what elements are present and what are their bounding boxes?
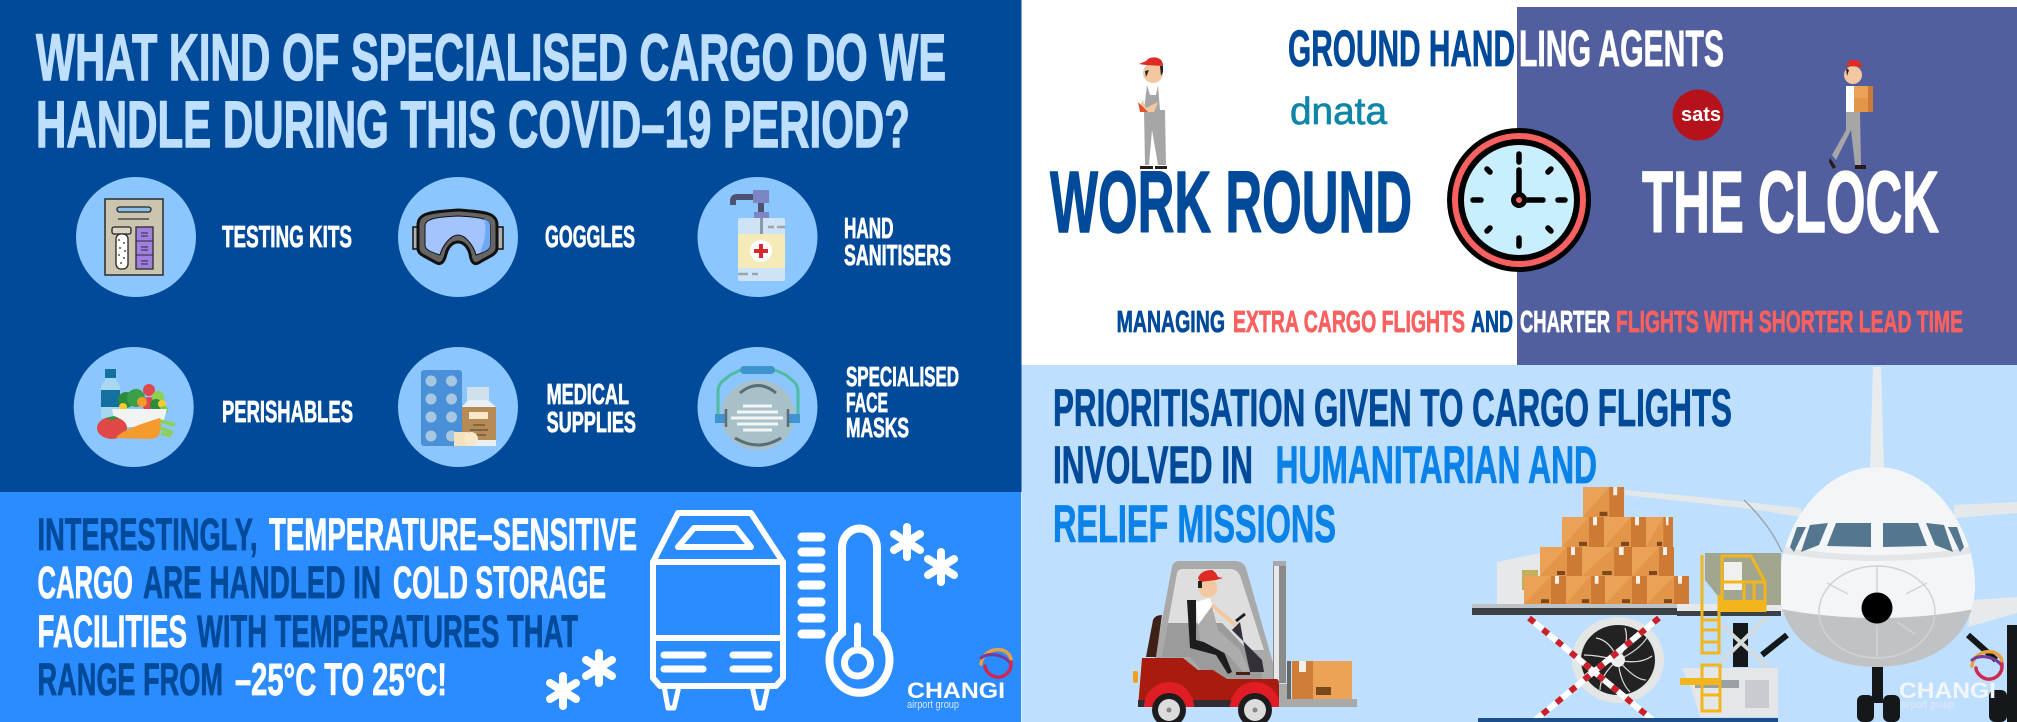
icon: snowflakes	[550, 527, 954, 706]
text block: cold storage facts: TEMPERATURE–SENSITIVE	[269, 509, 637, 560]
item: testing kits	[76, 177, 352, 297]
text block: cold storage facts: COLD STORAGE	[393, 557, 606, 608]
text: managing cargo flights	[1117, 304, 1963, 339]
text block: cold storage facts: FACILITIES	[38, 606, 187, 657]
icon: cold storage truck	[653, 513, 783, 708]
text: prioritisation heading	[1053, 379, 1732, 554]
item: hand sanitisers: HAND	[844, 213, 894, 245]
heading: ground handling agents: LING AGENTS	[1519, 20, 1724, 77]
title: HANDLE DURING THIS COVID–19 PERIOD?	[36, 87, 910, 161]
illustration: worker carrying boxes	[1829, 60, 1873, 169]
panel: specialised cargo	[0, 0, 1021, 492]
driver	[1187, 570, 1264, 675]
illustration: worker with clipboard	[1138, 57, 1167, 169]
text block: cold storage facts: CARGO	[38, 557, 133, 608]
item: perishables: PERISHABLES	[222, 394, 353, 429]
logo: changi airport group: airport group	[1900, 699, 1954, 711]
text: managing cargo flights: AND	[1471, 304, 1513, 339]
title	[36, 20, 946, 161]
text block: cold storage facts	[38, 509, 637, 705]
logo: changi airport group: CHANGI	[1899, 678, 1996, 703]
text block: cold storage facts: ARE HANDLED IN	[143, 557, 381, 608]
item: medical supplies	[398, 347, 636, 467]
illustration: jet engine	[1572, 617, 1664, 703]
text: prioritisation heading: INVOLVED IN	[1053, 436, 1253, 495]
text block: cold storage facts: –25°C TO 25°C!	[235, 654, 447, 705]
text: managing cargo flights: EXTRA CARGO FLIGHTS	[1233, 304, 1465, 339]
title: WHAT KIND OF SPECIALISED CARGO DO WE	[36, 20, 946, 94]
text block: cold storage facts: RANGE FROM	[38, 654, 223, 705]
illustration: boxes on cargo loader	[1472, 487, 1781, 722]
item: specialised face masks: MASKS	[846, 412, 909, 443]
item: medical supplies: MEDICAL	[547, 379, 629, 411]
panel: ground handling agents	[1020, 0, 2017, 492]
forklift body	[1138, 658, 1279, 707]
item: specialised face masks: SPECIALISED	[846, 361, 959, 392]
logo: changi airport group: airport group	[907, 699, 959, 711]
text: managing cargo flights: MANAGING	[1117, 304, 1225, 339]
cargo boxes	[1524, 487, 1689, 604]
panel: prioritisation of cargo flights	[1022, 365, 2017, 722]
logo: changi airport group	[1899, 652, 2002, 711]
logo: changi airport group: CHANGI	[907, 678, 1005, 703]
logo: dnata: dnata	[1290, 91, 1388, 133]
item: testing kits: TESTING KITS	[222, 219, 352, 254]
logo: sats	[1672, 90, 1724, 140]
icon: clock	[1447, 128, 1591, 272]
logo: changi airport group	[907, 650, 1011, 711]
panel: cold storage	[0, 492, 1021, 722]
item: hand sanitisers	[698, 177, 951, 297]
illustration: aircraft	[1625, 367, 2017, 722]
fork and box	[1279, 684, 1287, 707]
text block: cold storage facts: WITH TEMPERATURES THAT	[197, 606, 578, 657]
item: goggles: GOGGLES	[545, 219, 635, 254]
item: specialised face masks	[698, 347, 959, 467]
item: hand sanitisers: SANITISERS	[844, 240, 951, 272]
item: perishables	[74, 347, 353, 467]
heading: work round: WORK ROUND	[1050, 154, 1412, 251]
scissor lift	[1529, 618, 1659, 722]
fuselage	[1779, 467, 1975, 667]
item: specialised face masks: FACE	[846, 387, 888, 418]
icon: thermometer	[802, 528, 890, 693]
landing gear	[1733, 623, 2017, 722]
item: goggles	[398, 177, 635, 297]
text: prioritisation heading: RELIEF MISSIONS	[1053, 495, 1336, 554]
text block: cold storage facts: INTERESTINGLY,	[38, 509, 258, 560]
ground equipment	[1682, 668, 1778, 717]
logo: sats: sats	[1681, 104, 1721, 126]
text: managing cargo flights: CHARTER	[1520, 304, 1610, 339]
illustration: forklift	[1133, 561, 1357, 722]
item: medical supplies: SUPPLIES	[547, 407, 636, 439]
heading: ground handling agents: GROUND HAND	[1288, 20, 1515, 77]
text: prioritisation heading: HUMANITARIAN AND	[1276, 436, 1597, 495]
yellow access platform	[1705, 553, 1781, 605]
